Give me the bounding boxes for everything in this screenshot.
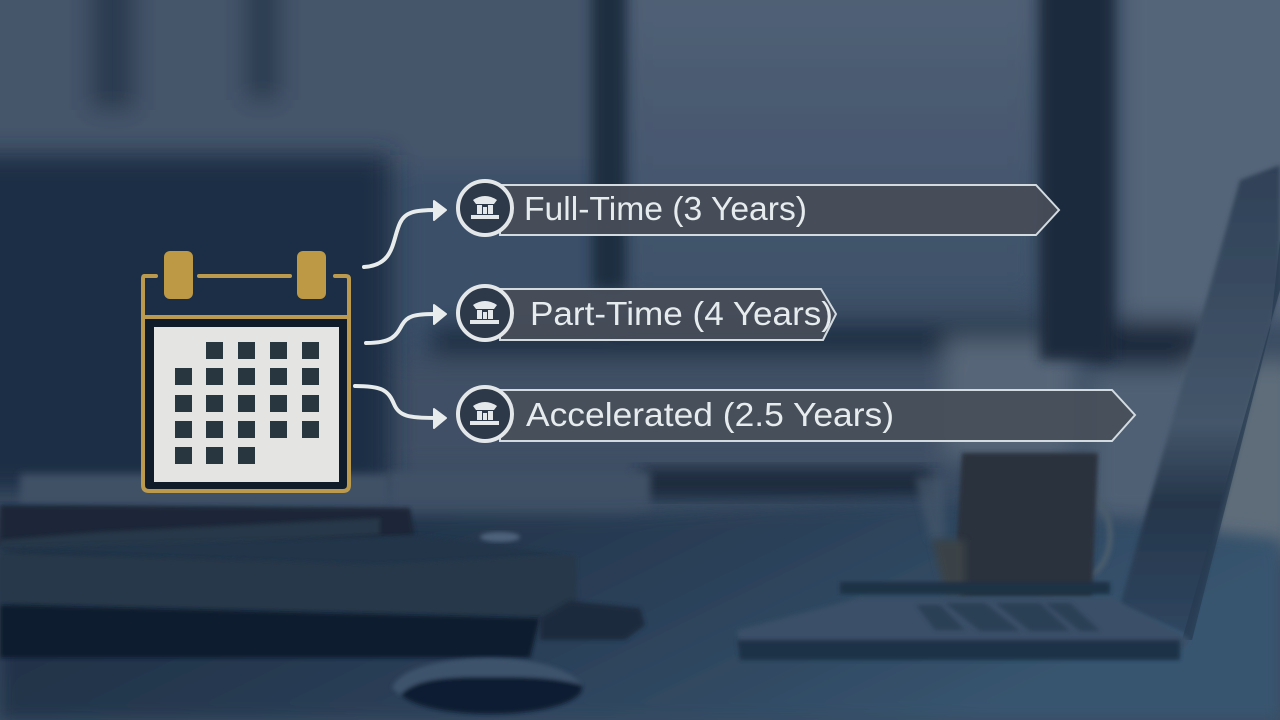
icon: badge circle bbox=[458, 181, 512, 235]
calendar icon bbox=[143, 251, 349, 491]
banner shape bbox=[500, 185, 1059, 235]
label: Accelerated (2.5 Years) bbox=[526, 396, 894, 433]
computer mouse bbox=[392, 658, 582, 714]
calendar date squares bbox=[175, 342, 319, 464]
option: full-time bbox=[458, 181, 1059, 235]
calendar dark body bbox=[144, 317, 349, 491]
banner shape bbox=[500, 390, 1135, 441]
laptop bbox=[737, 165, 1280, 660]
label: Full-Time (3 Years) bbox=[524, 190, 807, 227]
calendar binding rings bbox=[164, 251, 326, 299]
option: accelerated bbox=[458, 387, 1135, 441]
icon: badge circle bbox=[458, 387, 512, 441]
arrow: to part-time bbox=[366, 305, 446, 343]
icon: badge circle bbox=[458, 286, 512, 340]
option: part-time bbox=[458, 286, 836, 340]
icon: institution bbox=[471, 196, 499, 219]
icon: institution bbox=[470, 402, 499, 425]
books and pen bbox=[0, 505, 645, 658]
label: Part-Time (4 Years) bbox=[530, 295, 833, 332]
icon: institution bbox=[470, 301, 499, 324]
coffee mug bbox=[840, 453, 1110, 596]
banner shape bbox=[500, 289, 836, 340]
calendar gold frame bbox=[143, 276, 349, 491]
arrow: to accelerated bbox=[355, 386, 446, 428]
calendar white date panel bbox=[154, 327, 339, 482]
arrow: to full-time bbox=[364, 201, 446, 267]
desk surface bbox=[0, 500, 1280, 720]
